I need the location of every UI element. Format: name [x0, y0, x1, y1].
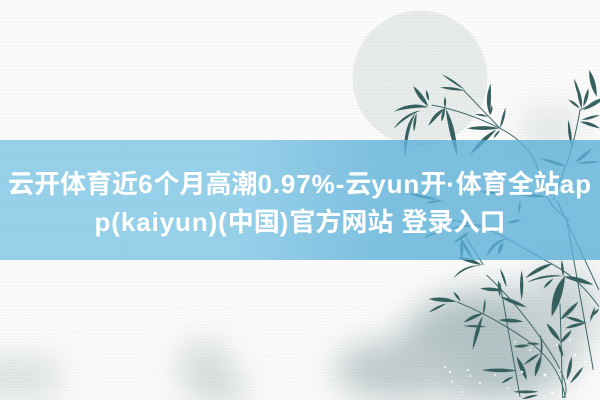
moon: [352, 10, 488, 146]
ink wash clouds: [0, 106, 600, 400]
title text: [8, 169, 592, 237]
title text: 云开体育近6个月高潮0.97%-云yun开·体育全站ap: [8, 169, 592, 199]
title text: p(kaiyun)(中国)官方网站 登录入口: [95, 207, 505, 237]
title band: [0, 140, 600, 260]
bamboo: upper branch: [393, 70, 600, 220]
ink speckles: [389, 41, 591, 394]
bamboo: lower cluster: [423, 200, 599, 399]
